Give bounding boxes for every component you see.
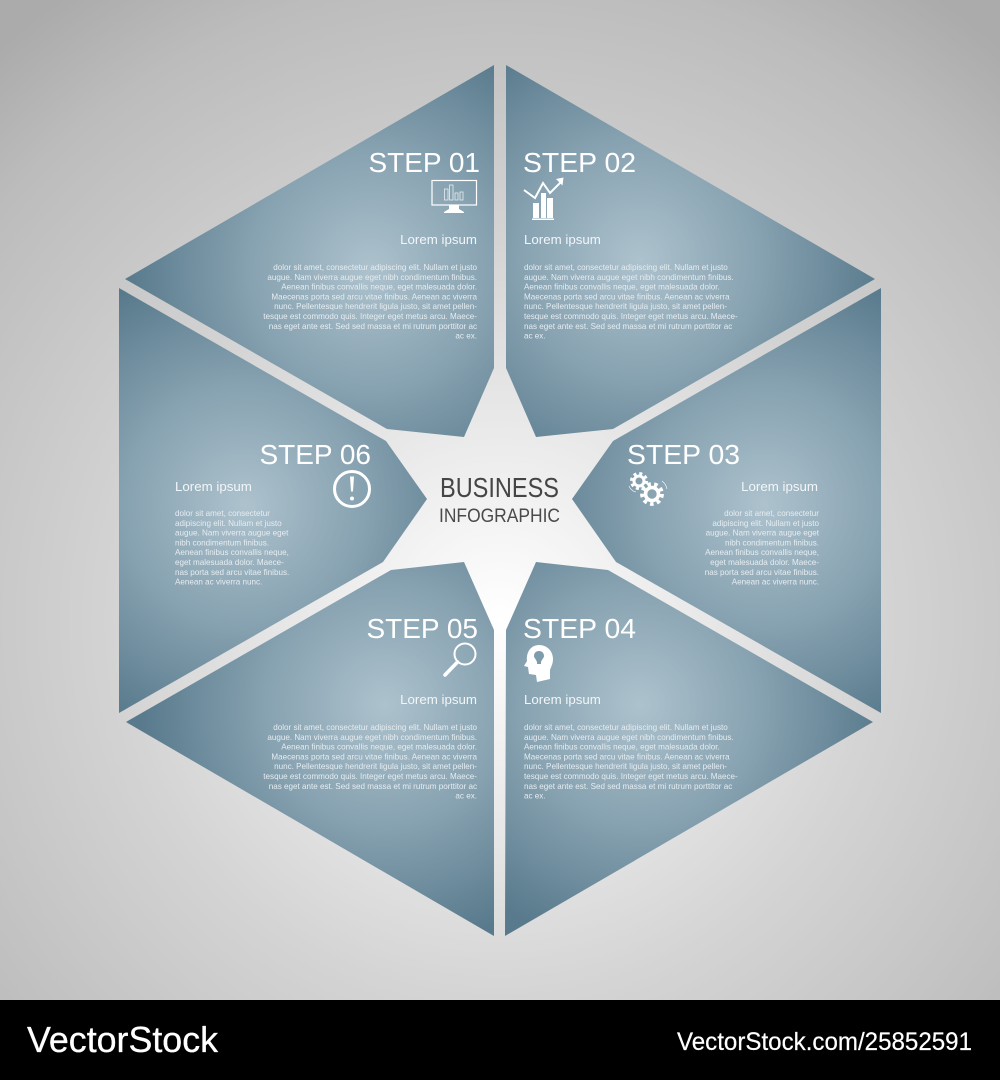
body text: step 06: nas porta sed arcu vitae finibus. [175, 568, 289, 577]
subheading: step 01: Lorem ipsum [400, 232, 477, 247]
panel shape: step 03 [572, 288, 881, 713]
body text: step 01: nas eget ante est. Sed sed massa et mi rutrum porttitor ac [269, 322, 477, 331]
heading: step 05: STEP 05 [366, 613, 478, 644]
panel shape: step 04 [505, 562, 873, 936]
body text: step 03: Aenean finibus convallis neque, [705, 548, 819, 557]
body text: step 04: nunc. Pellentesque hendrerit ligula justo, sit amet pellen- [524, 762, 727, 771]
body text: step 05: Maecenas porta sed arcu vitae finibus. Aenean ac viverra [271, 752, 477, 761]
body text: step 05: augue. Nam viverra augue eget nibh condimentum finibus. [267, 733, 477, 742]
panel: step 02 [506, 65, 875, 437]
body text: step 05: tesque est commodo quis. Integer eget metus arcu. Maece- [263, 772, 477, 781]
panel shape: step 05 [126, 562, 494, 936]
panel: step 04 [505, 562, 873, 936]
title: business: BUSINESS [440, 472, 559, 503]
body text: step 02: Aenean finibus convallis neque, eget malesuada dolor. [524, 283, 720, 292]
icon: exclamation in circle [334, 472, 370, 506]
body text: step 04: augue. Nam viverra augue eget nibh condimentum finibus. [524, 733, 734, 742]
panel shape: step 01 [125, 65, 494, 437]
body text: step 06: nibh condimentum finibus. [175, 538, 269, 547]
subtitle: infographic: INFOGRAPHIC [439, 505, 560, 527]
body text: step 01: Aenean finibus convallis neque, eget malesuada dolor. [281, 283, 477, 292]
body text: step 03: adipiscing elit. Nullam et justo [712, 519, 819, 528]
panel: step 05 [126, 562, 494, 936]
heading: step 04: STEP 04 [523, 613, 636, 644]
panel shape: step 02 [506, 65, 875, 437]
icon: growth chart with arrow [524, 178, 564, 220]
body text: step 01: augue. Nam viverra augue eget nibh condimentum finibus. [267, 273, 477, 282]
body text: step 05: Aenean finibus convallis neque, eget malesuada dolor. [281, 743, 477, 752]
subheading: step 02: Lorem ipsum [524, 232, 601, 247]
body text: step 01: dolor sit amet, consectetur adipiscing elit. Nullam et justo [273, 263, 477, 272]
subheading: step 06: Lorem ipsum [175, 479, 252, 494]
body text: step 04: ac ex. [524, 792, 546, 801]
body text: step 06: dolor sit amet, consectetur [175, 509, 270, 518]
body text: step 05: dolor sit amet, consectetur adipiscing elit. Nullam et justo [273, 723, 477, 732]
panel: step 06 [119, 288, 427, 713]
panel: step 03 [572, 288, 881, 713]
body text: step 02: dolor sit amet, consectetur adipiscing elit. Nullam et justo [524, 263, 728, 272]
body text: step 03: nas porta sed arcu vitae finibus. [705, 568, 819, 577]
body text: step 02: ac ex. [524, 332, 546, 341]
subheading: step 03: Lorem ipsum [741, 479, 818, 494]
body text: step 06: Aenean ac viverra nunc. [175, 578, 262, 587]
body text: step 03: eget malesuada dolor. Maece- [710, 558, 819, 567]
body text: step 06: Aenean finibus convallis neque, [175, 548, 289, 557]
icon: gears [629, 474, 667, 504]
body text: step 03: dolor sit amet, consectetur [724, 509, 819, 518]
heading: step 06: STEP 06 [259, 439, 371, 470]
body text: step 02: Maecenas porta sed arcu vitae finibus. Aenean ac viverra [524, 292, 730, 301]
body text: step 04: Aenean finibus convallis neque, eget malesuada dolor. [524, 743, 720, 752]
icon: head with light bulb [524, 645, 553, 682]
body text: step 02: nas eget ante est. Sed sed massa et mi rutrum porttitor ac [524, 322, 732, 331]
body text: step 03: Aenean ac viverra nunc. [732, 578, 819, 587]
body text: step 06: eget malesuada dolor. Maece- [175, 558, 284, 567]
footer url: VectorStock.com/25852591 [677, 1028, 972, 1056]
body text: step 03: augue. Nam viverra augue eget [706, 529, 820, 538]
body text: step 02: augue. Nam viverra augue eget nibh condimentum finibus. [524, 273, 734, 282]
body text: step 04: Maecenas porta sed arcu vitae finibus. Aenean ac viverra [524, 752, 730, 761]
body text: step 01: tesque est commodo quis. Integer eget metus arcu. Maece- [263, 312, 477, 321]
body text: step 04: dolor sit amet, consectetur adipiscing elit. Nullam et justo [524, 723, 728, 732]
body text: step 03: nibh condimentum finibus. [725, 538, 819, 547]
heading: step 01: STEP 01 [368, 147, 480, 178]
body text: step 05: nas eget ante est. Sed sed massa et mi rutrum porttitor ac [269, 782, 477, 791]
body text: step 06: augue. Nam viverra augue eget [175, 529, 289, 538]
footer bar [0, 1000, 1000, 1080]
body text: step 01: Maecenas porta sed arcu vitae finibus. Aenean ac viverra [271, 292, 477, 301]
heading: step 02: STEP 02 [523, 147, 636, 178]
body text: step 04: nas eget ante est. Sed sed massa et mi rutrum porttitor ac [524, 782, 732, 791]
body text: step 04: tesque est commodo quis. Integer eget metus arcu. Maece- [524, 772, 738, 781]
subheading: step 04: Lorem ipsum [524, 692, 601, 707]
icon: monitor with bar chart [432, 180, 476, 213]
body text: step 05: ac ex. [455, 792, 477, 801]
panel: step 01 [125, 65, 494, 437]
icon: magnifying glass [445, 644, 476, 675]
body text: step 01: nunc. Pellentesque hendrerit ligula justo, sit amet pellen- [274, 302, 477, 311]
footer logo: VectorStock [27, 1019, 219, 1060]
body text: step 02: nunc. Pellentesque hendrerit ligula justo, sit amet pellen- [524, 302, 727, 311]
heading: step 03: STEP 03 [627, 439, 740, 470]
subheading: step 05: Lorem ipsum [400, 692, 477, 707]
panel shape: step 06 [119, 288, 427, 713]
body text: step 05: nunc. Pellentesque hendrerit ligula justo, sit amet pellen- [274, 762, 477, 771]
body text: step 02: tesque est commodo quis. Integer eget metus arcu. Maece- [524, 312, 738, 321]
centre title [439, 472, 560, 527]
body text: step 06: adipiscing elit. Nullam et justo [175, 519, 282, 528]
body text: step 01: ac ex. [455, 332, 477, 341]
